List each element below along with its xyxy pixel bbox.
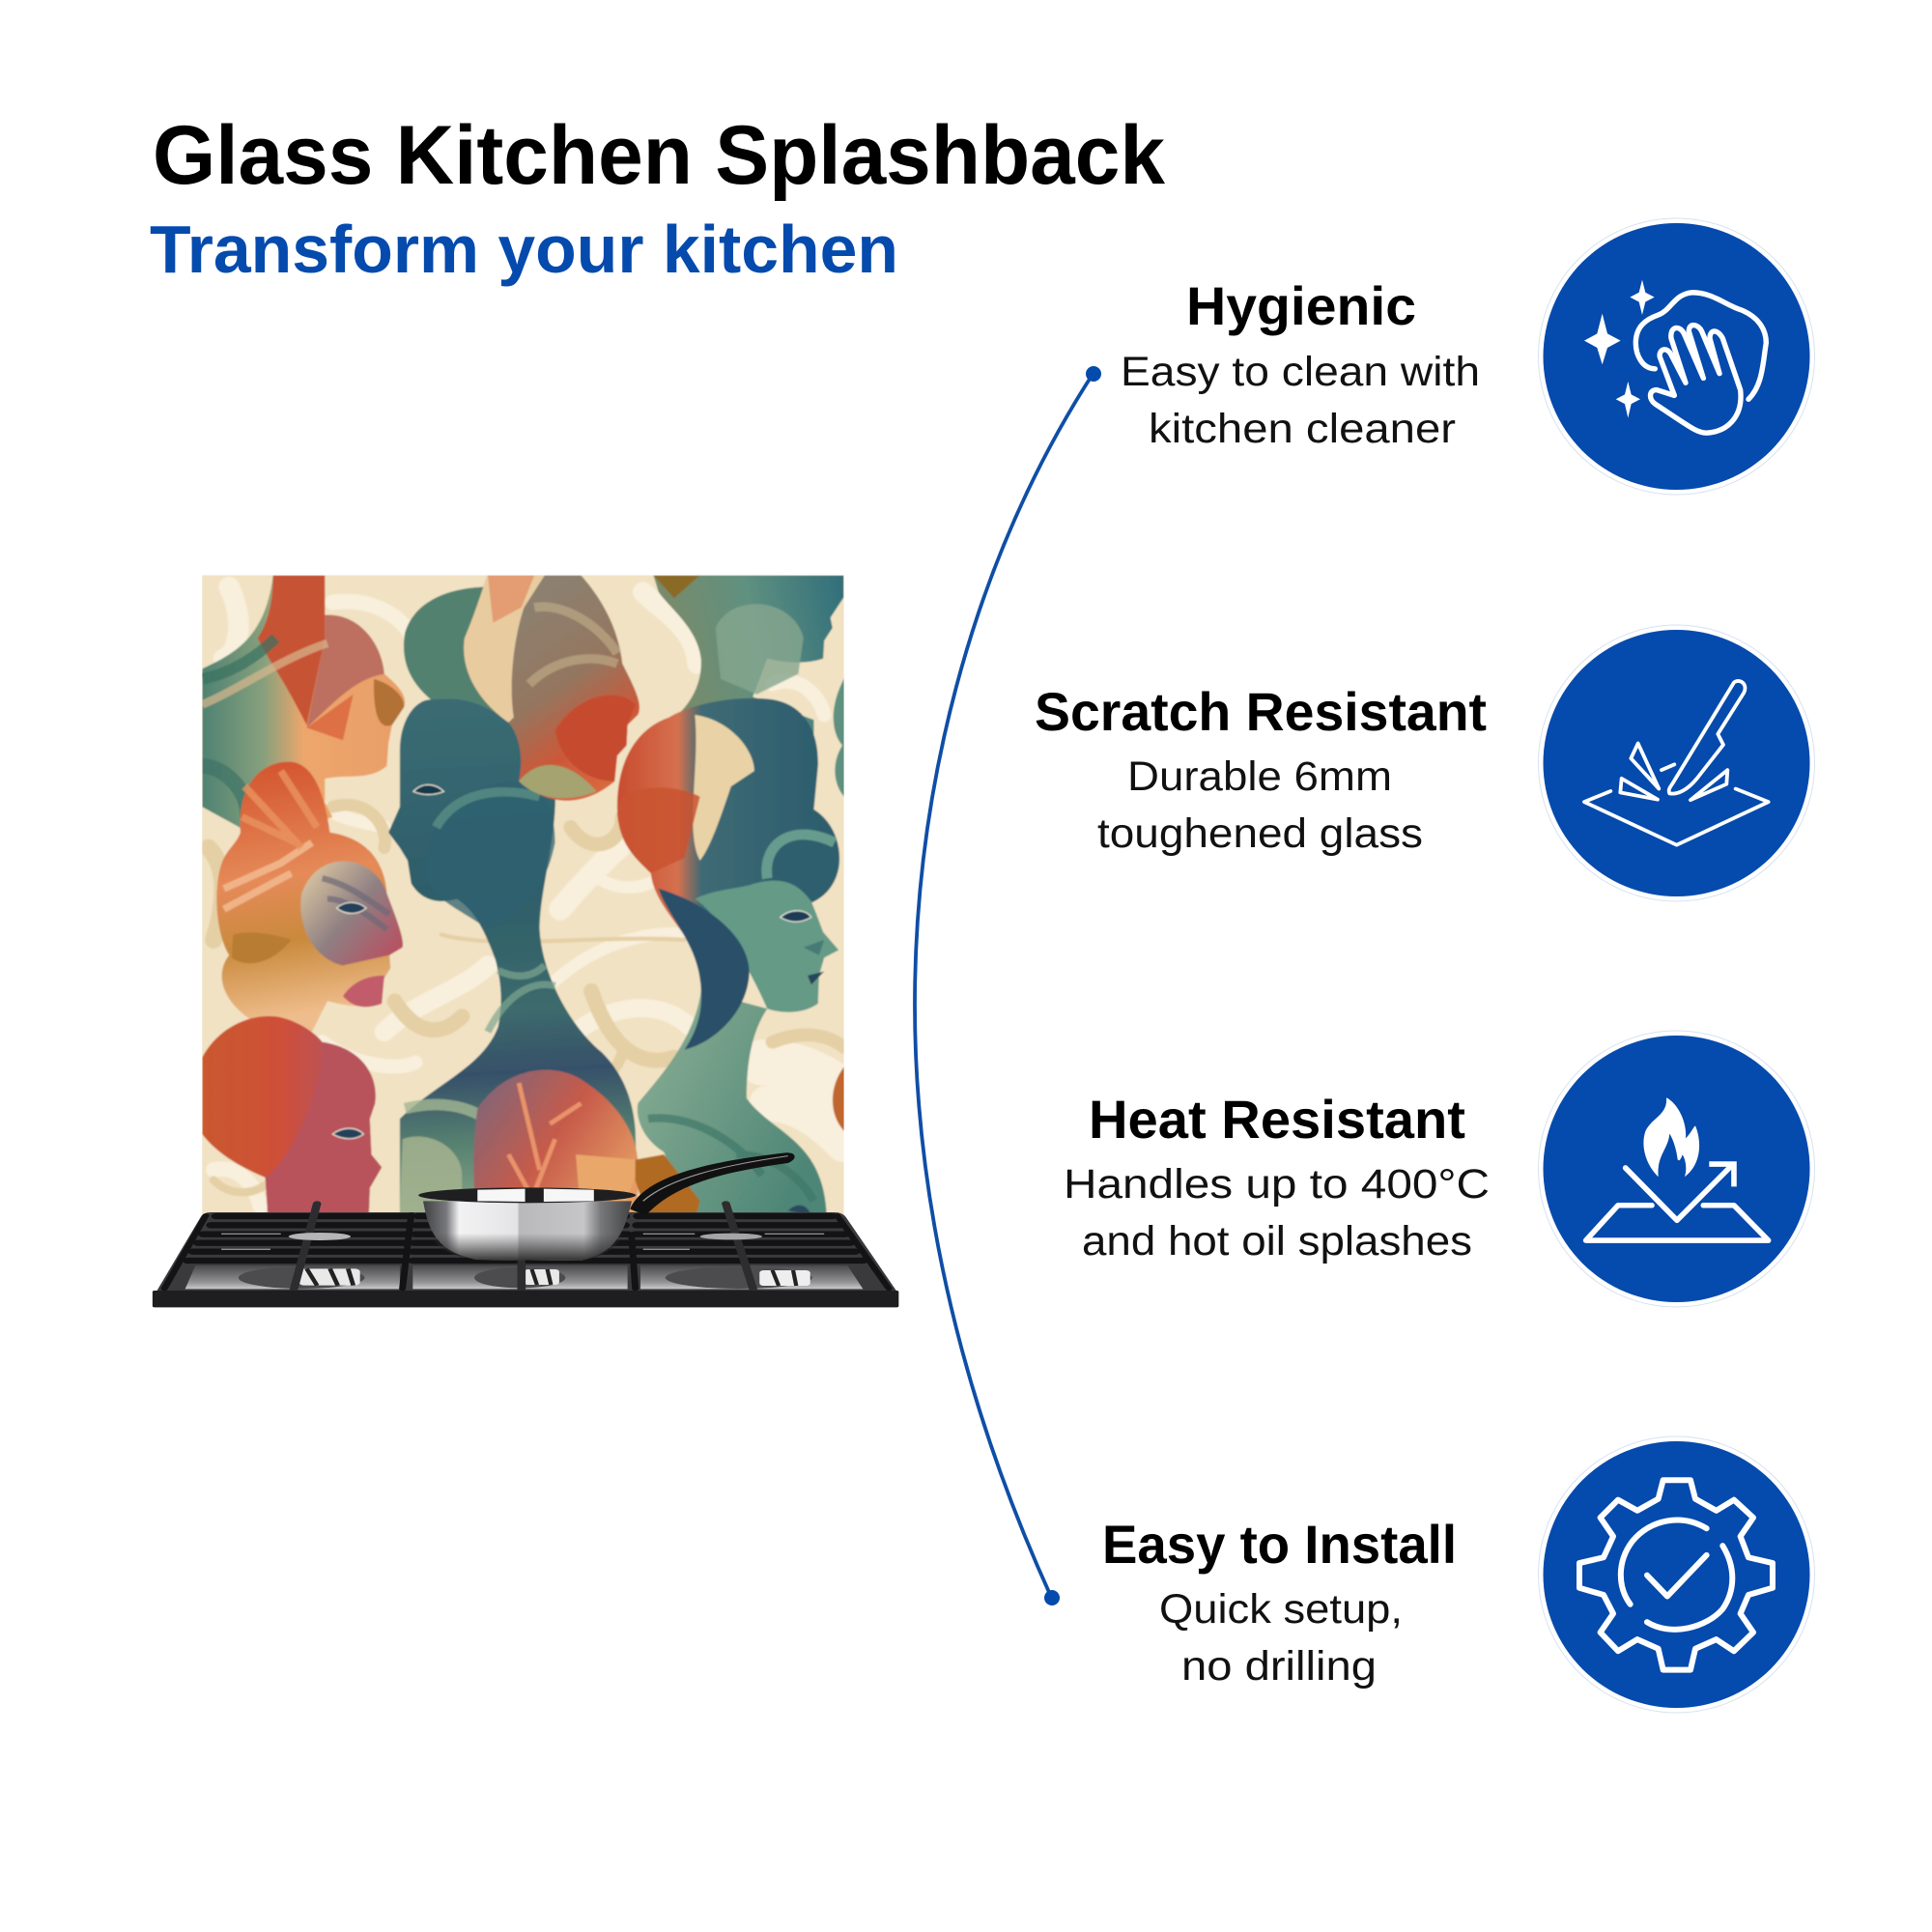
feature text: scratch resistant: Scratch Resistant [1035, 681, 1487, 742]
feature text: scratch resistant: Durable 6mm [1127, 753, 1392, 800]
subtitle: Transform your kitchen [150, 212, 898, 287]
feature text: heat resistant: Heat Resistant [1089, 1089, 1465, 1150]
pan interior [418, 1187, 636, 1203]
connector curve [915, 366, 1101, 1605]
feature text: heat resistant: and hot oil splashes [1082, 1218, 1472, 1264]
eye [413, 784, 443, 795]
figure: middle left head [216, 762, 403, 1032]
grates [164, 1204, 889, 1290]
pan handle [630, 1152, 795, 1215]
eye [781, 911, 811, 922]
icon: hand wiping cloth [1538, 218, 1814, 495]
feature text: easy to install: Easy to Install [1102, 1514, 1457, 1575]
feature text: heat resistant: Handles up to 400°C [1064, 1161, 1490, 1208]
figure: top right head [653, 576, 844, 735]
figure: upper centre head [464, 575, 639, 801]
figure: bottom centre shoulders [388, 587, 638, 1217]
icon: knife scratching glass [1538, 625, 1814, 901]
pan body [423, 1201, 632, 1261]
feature text: hygienic: kitchen cleaner [1149, 406, 1456, 452]
feature text: hygienic: Hygienic [1186, 275, 1416, 336]
stove with pan [153, 1152, 898, 1307]
edge shapes at right [636, 668, 850, 1221]
feature text: easy to install: Quick setup, [1159, 1586, 1403, 1633]
feature text: scratch resistant: toughened glass [1097, 810, 1423, 857]
feature text: heat resistant [1064, 1089, 1490, 1264]
figure: right tall figure [617, 698, 839, 1217]
icon: gear with check [1538, 1436, 1814, 1713]
feature text: hygienic [1121, 275, 1480, 452]
figure: upper left head [202, 575, 405, 842]
hob body [156, 1212, 896, 1292]
figure: lower left head [202, 1016, 382, 1217]
hob front bar [153, 1291, 898, 1307]
eye [337, 902, 366, 914]
icon: flame over glass [1538, 1031, 1814, 1307]
title: Glass Kitchen Splashback [153, 109, 1165, 202]
glass burner windows [185, 1265, 863, 1289]
feature text: hygienic: Easy to clean with [1121, 349, 1480, 395]
burners [239, 1266, 812, 1289]
feature text: easy to install: no drilling [1181, 1643, 1377, 1690]
splashback artwork panel [193, 566, 855, 1226]
eye [332, 1128, 363, 1139]
feature text: easy to install [1102, 1514, 1457, 1690]
feature text: scratch resistant [1035, 681, 1487, 857]
